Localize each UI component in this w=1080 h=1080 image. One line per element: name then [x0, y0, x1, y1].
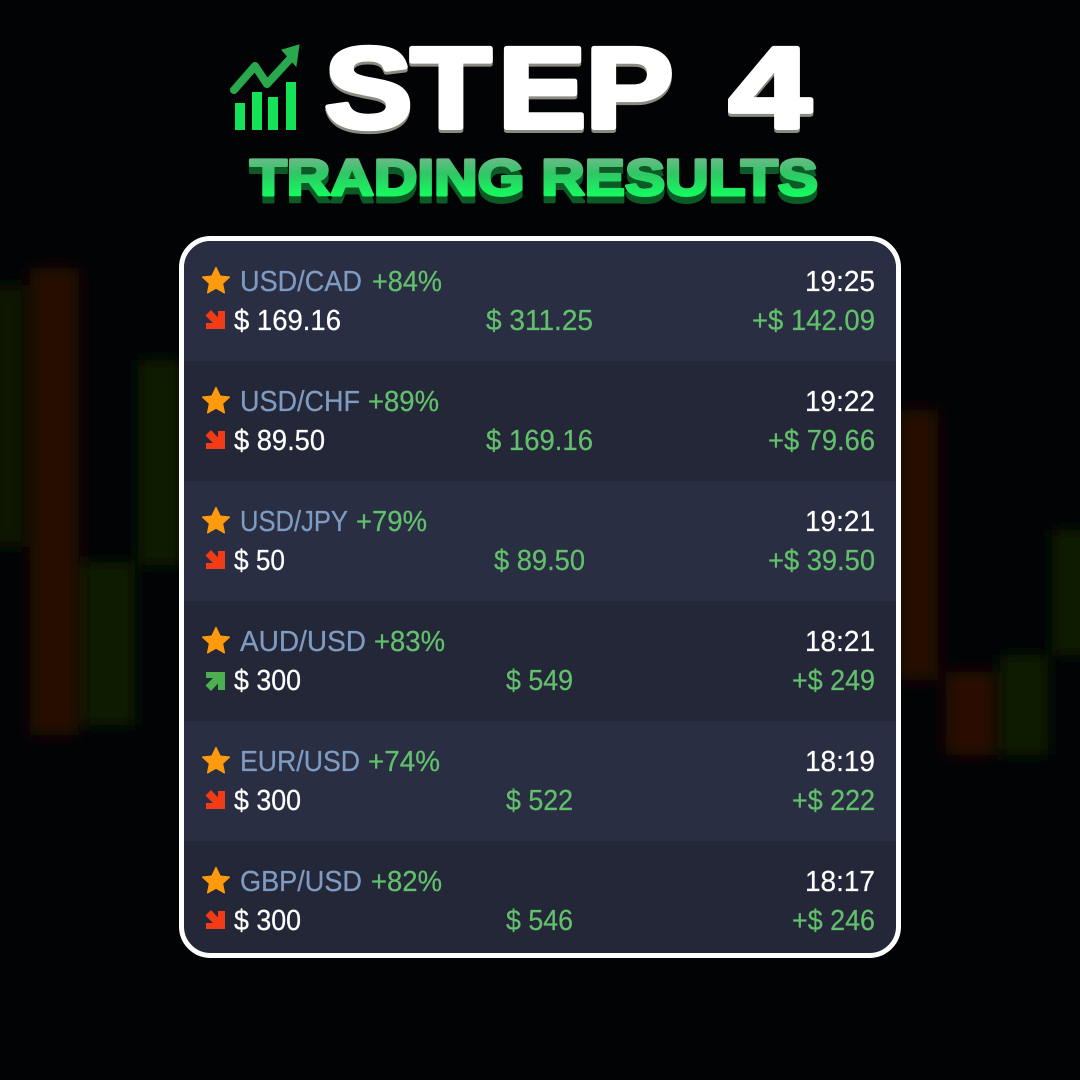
icon: growth chart	[234, 45, 299, 130]
row: EUR/USD: EUR/USD	[240, 746, 360, 778]
row: USD/CAD: $ 169.16	[234, 305, 341, 337]
row: USD/JPY: $ 50	[234, 545, 285, 577]
row: USD/CAD: +84%	[372, 266, 442, 298]
row: GBP/USD: $ 300	[234, 905, 301, 937]
row: USD/JPY: 19:21	[805, 506, 875, 538]
row: USD/CHF: +$ 79.66	[768, 425, 875, 457]
row: GBP/USD: GBP/USD	[240, 866, 362, 898]
row: EUR/USD: $ 300	[234, 785, 301, 817]
row: AUD/USD: $ 549	[506, 665, 573, 697]
row: USD/CAD: USD/CAD	[240, 266, 362, 298]
row: AUD/USD: AUD/USD	[240, 626, 366, 658]
row: USD/CHF: 19:22	[805, 386, 875, 418]
row: AUD/USD: +83%	[374, 626, 445, 658]
row: GBP/USD: 18:17	[805, 866, 875, 898]
row: USD/CHF: $ 169.16	[486, 425, 593, 457]
row: GBP/USD: +$ 246	[792, 905, 875, 937]
row: EUR/USD: +$ 222	[792, 785, 875, 817]
row: USD/JPY: USD/JPY	[240, 506, 348, 538]
row: GBP/USD: $ 546	[506, 905, 573, 937]
row: USD/JPY: $ 89.50	[494, 545, 585, 577]
row: USD/CHF: $ 89.50	[234, 425, 325, 457]
row: USD/CAD	[203, 266, 875, 337]
row: GBP/USD: +82%	[371, 866, 442, 898]
title: STEP 4: STEP	[324, 24, 674, 153]
row: EUR/USD: +74%	[368, 746, 440, 778]
row: USD/CAD: $ 311.25	[486, 305, 593, 337]
row: EUR/USD	[203, 746, 875, 817]
row: GBP/USD	[203, 866, 875, 937]
row: AUD/USD: 18:21	[805, 626, 875, 658]
row: USD/JPY: +79%	[356, 506, 427, 538]
title: STEP 4: 4	[729, 24, 811, 152]
row: AUD/USD	[203, 626, 875, 697]
title: STEP 4: STEP	[324, 27, 674, 156]
row: USD/CHF: +89%	[368, 386, 439, 418]
title: STEP 4: 4	[729, 28, 811, 156]
row: USD/JPY	[203, 506, 875, 577]
row: EUR/USD: 18:19	[805, 746, 875, 778]
background: blurred candlesticks	[0, 268, 1080, 755]
row: AUD/USD: $ 300	[234, 665, 301, 697]
row: USD/CHF: USD/CHF	[240, 386, 360, 418]
subtitle: TRADING RESULTS: TRADING RESULTS	[250, 156, 818, 213]
row: EUR/USD: $ 522	[506, 785, 573, 817]
row: USD/CAD: +$ 142.09	[752, 305, 875, 337]
subtitle: TRADING RESULTS: TRADING RESULTS	[250, 149, 818, 206]
row: USD/CAD: 19:25	[805, 266, 875, 298]
row: AUD/USD: +$ 249	[792, 665, 875, 697]
row: USD/JPY: +$ 39.50	[768, 545, 875, 577]
panel: trades table	[182, 238, 898, 956]
row: USD/CHF	[203, 386, 875, 457]
